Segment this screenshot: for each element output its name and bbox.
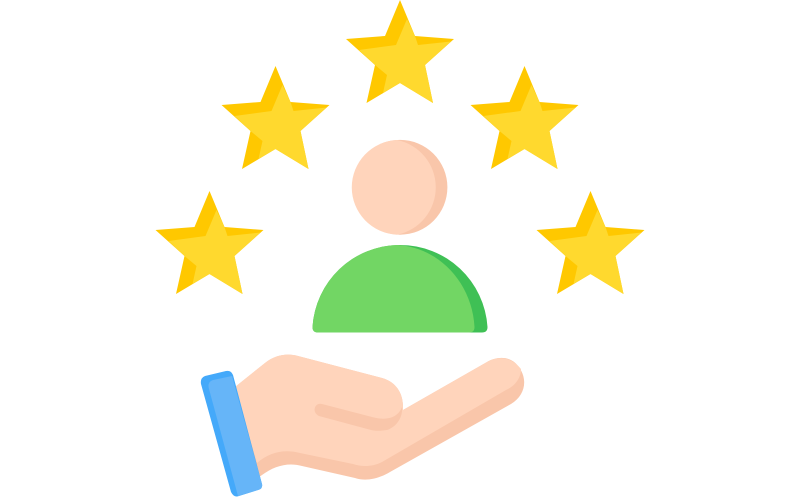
hand bbox=[235, 355, 521, 466]
star: top center bbox=[346, 0, 454, 103]
icon: open hand bbox=[201, 355, 524, 496]
star: right bbox=[470, 66, 578, 169]
icon: person bbox=[312, 140, 488, 332]
person head bbox=[352, 140, 447, 235]
person body bbox=[312, 245, 488, 332]
star: left bbox=[222, 66, 330, 169]
star: far right bbox=[536, 191, 644, 294]
hand shadow bbox=[235, 355, 524, 480]
star: far left bbox=[156, 191, 264, 294]
thumb crease bbox=[315, 404, 402, 431]
sleeve cuff bbox=[201, 371, 262, 496]
